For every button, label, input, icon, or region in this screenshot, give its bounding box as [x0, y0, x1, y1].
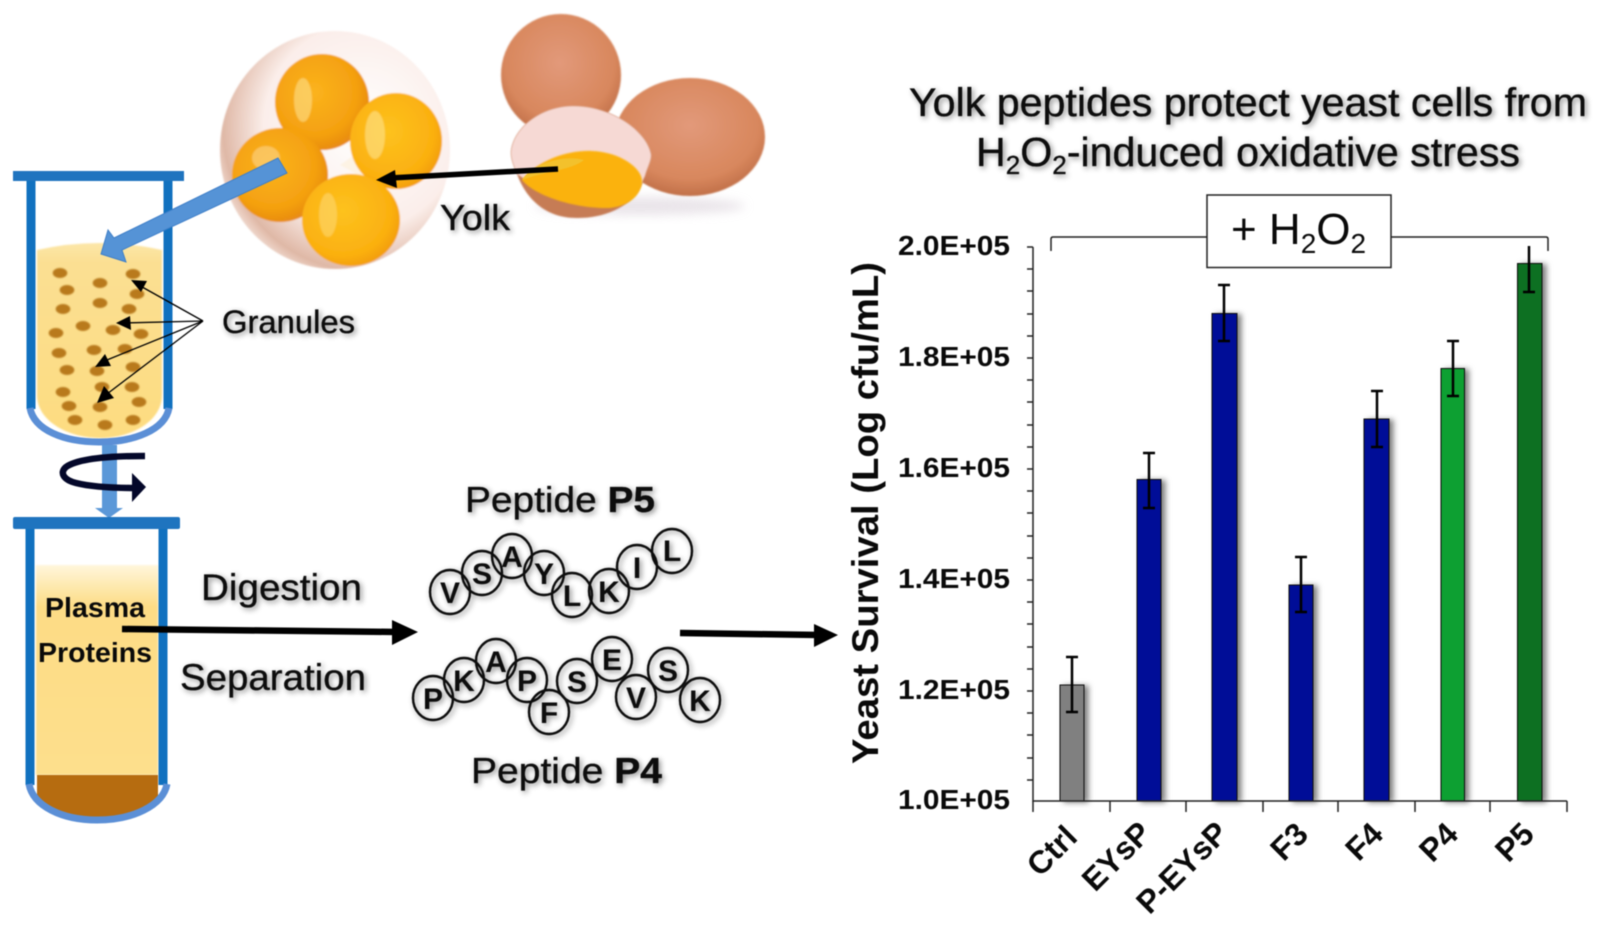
y-axis tick labels: 2.0E+05	[898, 230, 1010, 261]
chart title: O	[1020, 129, 1052, 175]
y-axis tick labels: 1.4E+05	[898, 563, 1010, 594]
tube liquid	[37, 243, 162, 438]
peptide P5 chain: K	[598, 576, 620, 609]
peptide P5 chain: L	[563, 580, 581, 613]
y-axis tick labels: 1.2E+05	[898, 674, 1010, 705]
granule pointer arrows	[95, 280, 203, 403]
chart title: 2	[1052, 150, 1067, 180]
label: Plasma Proteins: Proteins	[38, 637, 152, 668]
y-axis tick labels	[898, 230, 1010, 815]
arrow: plasma to peptides	[122, 620, 418, 645]
arrow: peptides to chart	[680, 624, 838, 647]
label: Granules: Granules	[222, 304, 355, 340]
y-axis tick labels: 1.6E+05	[898, 452, 1010, 483]
peptide P4 chain: K	[453, 665, 475, 698]
chart title	[909, 81, 1587, 180]
test tube with granules	[13, 171, 184, 442]
treatment box: + H2O2: + H	[1231, 205, 1301, 254]
label: Digestion: Digestion	[201, 567, 362, 608]
label: Plasma Proteins: Plasma	[45, 592, 145, 623]
tube walls and cap	[13, 171, 184, 442]
test tube with plasma proteins	[13, 517, 180, 820]
x-axis labels: F4	[1338, 815, 1390, 867]
tube walls and cap	[13, 517, 180, 820]
treatment box: + H2O2: O	[1316, 205, 1351, 254]
photo: bowl with four yolks	[220, 31, 450, 269]
chart title: 2	[1006, 150, 1020, 180]
x-axis labels: EYsP	[1075, 814, 1158, 898]
label: Separation: Separation	[180, 657, 366, 698]
peptide P5 chain	[430, 529, 692, 617]
blue arrow: yolk into tube	[101, 158, 287, 262]
label: Yolk: Yolk	[440, 197, 511, 238]
peptide P5 chain: S	[472, 558, 492, 591]
photo: whole brown eggs and cracked egg	[495, 8, 765, 218]
peptide P4 chain	[413, 637, 720, 734]
x-axis labels: Ctrl	[1020, 818, 1084, 883]
peptide P4 chain: V	[626, 682, 646, 715]
peptide P4 chain: E	[602, 644, 622, 677]
label: Peptide P4: Peptide P4	[471, 750, 662, 791]
label: Plasma Proteins	[38, 592, 152, 668]
peptide P5 chain: Y	[534, 558, 554, 591]
x-axis labels: F3	[1263, 815, 1315, 867]
y-axis tick labels: 1.8E+05	[898, 341, 1010, 372]
plasma liquid	[36, 565, 158, 775]
peptide P4 chain: K	[689, 685, 711, 718]
peptide P5 chain: V	[440, 577, 460, 610]
arrow: yolk to bowl	[376, 169, 558, 188]
y-axis tick labels: 1.0E+05	[898, 784, 1010, 815]
peptide P4 chain: P	[423, 683, 443, 716]
chart title: H	[976, 129, 1006, 175]
peptide P4 chain: P	[517, 665, 537, 698]
peptide P5 chain: I	[633, 552, 641, 585]
peptide P5 chain: L	[663, 535, 681, 568]
x-axis labels: P4	[1412, 815, 1465, 869]
x-axis labels: P5	[1488, 815, 1541, 869]
axes and ticks	[1027, 247, 1567, 812]
chart title: -induced oxidative stress	[1067, 129, 1520, 175]
brown pellet	[37, 775, 158, 817]
treatment box: + H2O2	[1207, 195, 1391, 268]
x-axis labels	[1020, 814, 1541, 920]
label: Peptide P5: Peptide P5	[465, 479, 655, 520]
stem with spin arrow between tubes	[63, 445, 146, 518]
chart title: Yolk peptides protect yeast cells from	[909, 81, 1587, 125]
error bars	[1066, 246, 1535, 712]
peptide P4 chain: S	[567, 666, 587, 699]
treatment box: + H2O2: 2	[1301, 228, 1316, 259]
peptide P4 chain: A	[485, 646, 507, 679]
treatment box: + H2O2: 2	[1351, 228, 1366, 259]
peptide P4 chain: S	[658, 655, 678, 688]
x-axis labels: P-EYsP	[1129, 814, 1235, 920]
peptide P4 chain: F	[540, 697, 558, 730]
peptide P5 chain: A	[501, 541, 523, 574]
bar chart	[845, 195, 1567, 920]
bars	[1060, 264, 1542, 801]
y-axis title: Yeast Survival (Log cfu/mL)	[845, 262, 886, 764]
granules	[49, 268, 148, 430]
bracket	[1051, 237, 1548, 251]
